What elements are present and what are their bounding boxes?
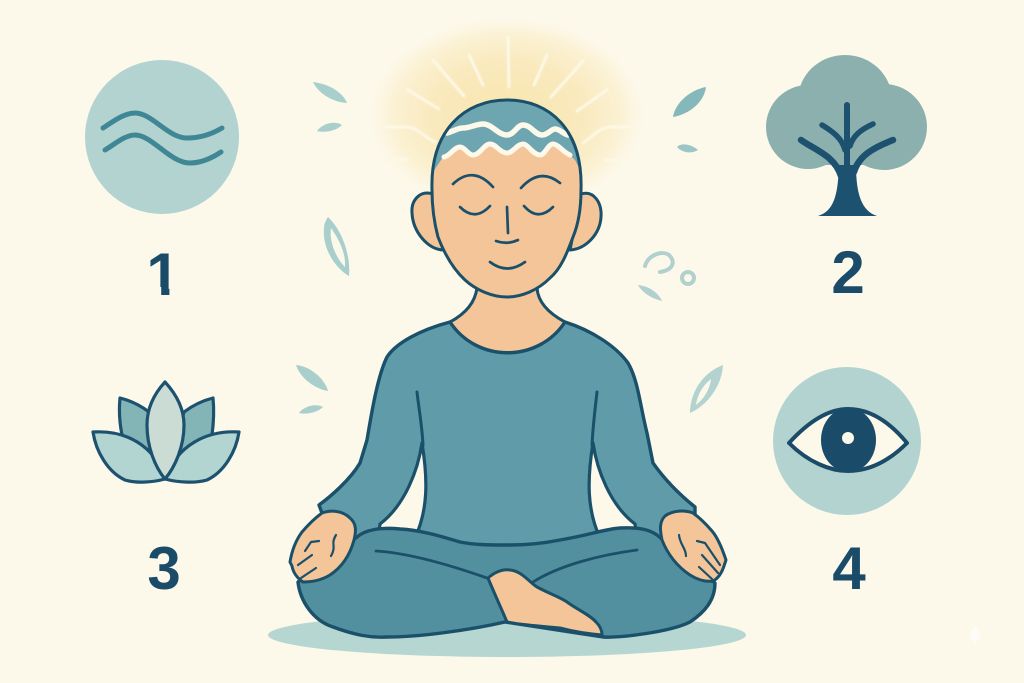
white wave upper — [447, 124, 568, 135]
torso and arms — [319, 322, 695, 560]
icon 4: eye in circle — [773, 367, 921, 515]
neck — [450, 285, 565, 362]
foot — [488, 570, 602, 635]
glow behind head — [371, 19, 643, 211]
number 3: 3 — [147, 535, 181, 602]
icon 1: waves in circle — [85, 60, 239, 214]
armpit gap right — [589, 443, 637, 538]
number 4: 4 — [832, 535, 866, 602]
floating leaves right — [638, 87, 723, 413]
icon 2: tree — [766, 55, 927, 216]
floating leaves left — [296, 82, 349, 414]
front petals — [93, 432, 165, 482]
neck outlines — [450, 288, 565, 322]
tree trunk and branches — [801, 105, 893, 216]
right hand — [660, 511, 726, 581]
left hand — [290, 511, 355, 582]
face features — [453, 175, 560, 268]
arm inner lines — [417, 392, 597, 445]
tree canopy — [766, 55, 927, 170]
right ear — [570, 193, 601, 250]
light rays — [385, 37, 632, 160]
white wave lower — [444, 144, 570, 157]
number 2: 2 — [831, 239, 865, 306]
head outline — [432, 100, 581, 297]
corner sparkle — [969, 626, 981, 644]
head — [432, 100, 581, 297]
left ear — [412, 193, 444, 250]
icon 3: lotus — [93, 382, 239, 482]
armpit gap left — [378, 443, 426, 538]
back petals — [119, 398, 165, 478]
floor shadow — [268, 613, 746, 657]
centre petal — [147, 382, 184, 479]
figure — [290, 100, 726, 637]
hair — [433, 100, 581, 172]
leg fold lines — [376, 550, 637, 582]
number 1: 1 — [146, 241, 180, 308]
legs — [298, 528, 715, 637]
